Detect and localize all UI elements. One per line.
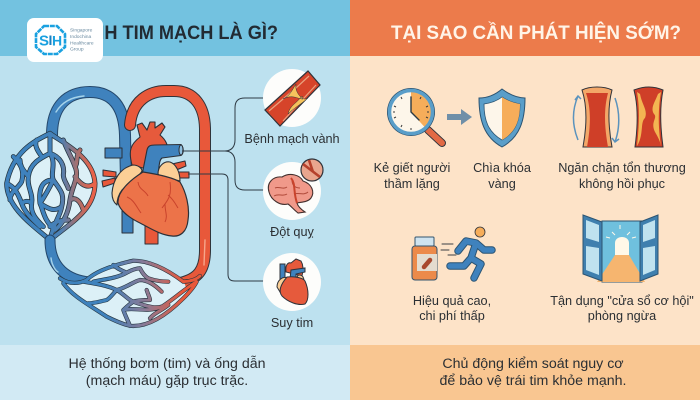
pulmonary artery bbox=[142, 144, 183, 176]
icon: clot magnified bbox=[301, 159, 323, 181]
icon: narrowed artery bbox=[265, 71, 320, 126]
text: window bbox=[550, 294, 694, 323]
text: window: Tận dụng "cửa sổ cơ hội" bbox=[550, 294, 694, 308]
logo mark: H bbox=[52, 32, 62, 48]
text: efficiency bbox=[413, 294, 491, 323]
icon: magnifier with clock bbox=[387, 88, 442, 143]
footer text: right: Chủ động kiểm soát nguy cơ bbox=[442, 356, 624, 372]
label: heart failure: Suy tim bbox=[271, 316, 313, 330]
text: prevent damage: Ngăn chặn tổn thương bbox=[558, 161, 686, 175]
icon: shield bbox=[479, 89, 525, 147]
text: silent killer bbox=[374, 161, 450, 191]
blue vein to lower network bbox=[50, 240, 90, 282]
aorta bbox=[130, 122, 168, 170]
logo text bbox=[70, 28, 94, 52]
connector lines bbox=[182, 98, 264, 281]
logo text: Indochina bbox=[70, 34, 91, 40]
text: golden key: vàng bbox=[488, 177, 516, 191]
icon: healthy vessel bbox=[582, 87, 612, 147]
logo mark: S bbox=[39, 32, 49, 50]
item: golden key bbox=[473, 89, 532, 191]
panel: right header bbox=[350, 0, 700, 56]
panel: left footer bbox=[0, 345, 350, 400]
label: stroke: Đột quỵ bbox=[270, 225, 315, 239]
icon: plaque vessel bbox=[634, 87, 663, 147]
blue pulmonary arch bbox=[52, 92, 126, 180]
panel: right footer bbox=[350, 345, 700, 400]
right atrium bbox=[112, 165, 142, 205]
label: coronary disease: Bệnh mạch vành bbox=[244, 132, 340, 146]
text: golden key bbox=[473, 161, 532, 191]
right panel background bbox=[350, 0, 700, 400]
circulation diagram bbox=[7, 91, 205, 326]
panel: left header bbox=[0, 0, 350, 56]
heart bbox=[102, 122, 189, 244]
logo text: Group bbox=[70, 46, 84, 52]
lower capillary network bbox=[60, 261, 200, 326]
left panel background bbox=[0, 0, 350, 400]
text: efficiency: chi phí thấp bbox=[419, 309, 485, 323]
logo mark: I bbox=[49, 32, 52, 48]
item: prevent irreversible damage bbox=[558, 87, 686, 191]
icon: flex arrows bbox=[574, 96, 619, 142]
text: efficiency: Hiệu quả cao, bbox=[413, 294, 491, 308]
callout: stroke bbox=[263, 159, 323, 239]
left capillary network bbox=[7, 133, 95, 240]
logo mark bbox=[36, 26, 65, 54]
coronary veins bbox=[127, 182, 178, 222]
heading: why early detection: TẠI SAO CẦN PHÁT HIỆN SỚM? bbox=[391, 20, 681, 44]
left atrium bbox=[158, 162, 180, 181]
item: silent killer bbox=[374, 88, 450, 191]
item: high efficiency low cost bbox=[412, 227, 492, 323]
footer text: right bbox=[440, 356, 626, 389]
logo bbox=[27, 18, 103, 62]
heading: what is cardiovascular disease: BỆNH TIM MẠCH LÀ GÌ? bbox=[66, 20, 278, 44]
item: window of opportunity bbox=[550, 215, 694, 323]
ventricles bbox=[118, 172, 189, 236]
icon: brain bbox=[268, 174, 313, 213]
red systemic artery bbox=[130, 91, 205, 283]
text: prevent damage: không hồi phục bbox=[579, 177, 666, 191]
text: golden key: Chìa khóa bbox=[473, 161, 532, 175]
callout: coronary disease bbox=[244, 69, 340, 146]
footer text: left: Hệ thống bơm (tim) và ống dẫn bbox=[68, 355, 266, 372]
text: silent killer: thầm lặng bbox=[384, 177, 440, 191]
icon: small heart bbox=[277, 259, 308, 305]
text: window: phòng ngừa bbox=[588, 309, 657, 323]
icon: open window bbox=[583, 215, 658, 282]
footer text: right: để bảo vệ trái tim khỏe mạnh. bbox=[440, 373, 626, 389]
text: silent killer: Kẻ giết người bbox=[374, 161, 450, 175]
icon: pill bottle bbox=[412, 237, 437, 280]
icon: runner bbox=[441, 227, 492, 278]
vessel opening bbox=[179, 145, 183, 155]
text: prevent damage bbox=[558, 161, 686, 191]
arrow bbox=[447, 109, 472, 125]
logo text: Healthcare bbox=[70, 40, 94, 46]
footer text: left: (mạch máu) gặp trục trặc. bbox=[86, 373, 248, 389]
footer text: left bbox=[68, 355, 266, 389]
callout: heart failure bbox=[263, 253, 321, 330]
logo text: Singapore bbox=[70, 28, 93, 34]
vessel stubs bbox=[102, 148, 189, 244]
